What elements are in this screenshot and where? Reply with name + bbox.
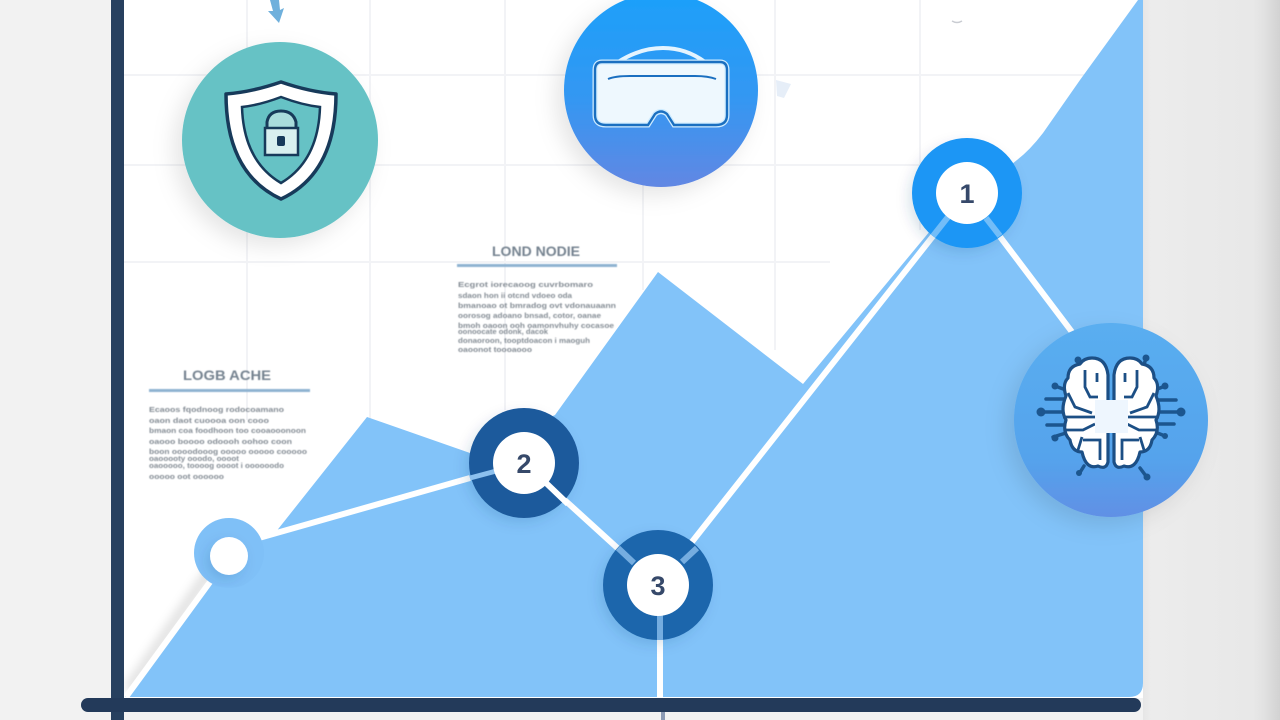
horizontal axis xyxy=(81,698,1141,720)
body text: oaoonot toooaooo xyxy=(458,345,532,354)
text block: LOGB ACHE xyxy=(149,367,310,481)
body text: oaooooo, toooog oooot i oooooodo xyxy=(149,461,284,470)
line shadow xyxy=(128,560,222,690)
node 3 xyxy=(603,530,713,640)
heading underline xyxy=(149,389,310,392)
body text: bmanoao ot bmradog ovt vdonauaann xyxy=(458,301,616,310)
body text: oaooo boooo odoooh oohoo coon xyxy=(149,437,292,446)
body text: oaon daot cuoooa oon cooo xyxy=(149,416,269,425)
heading underline xyxy=(457,264,617,267)
body text: oaooooty ooodo, oooot xyxy=(149,454,240,463)
heading: LOGB ACHE: LOGB ACHE xyxy=(183,367,271,383)
icon: VR headset xyxy=(564,0,758,187)
heading: LOND NODIE: LOND NODIE xyxy=(492,243,580,259)
body text: ooooo oot oooooo xyxy=(149,472,224,481)
icon: shield with padlock xyxy=(182,42,378,238)
node: start point xyxy=(194,518,264,588)
chart plot area xyxy=(124,0,1143,698)
body text xyxy=(458,280,616,354)
body text: bmoh oaoon ooh oamonvhuhy cocasoe xyxy=(458,321,614,330)
node 3: 3 xyxy=(650,571,666,601)
right margin xyxy=(1143,0,1280,720)
area chart xyxy=(125,0,1143,697)
arrow xyxy=(268,0,284,23)
body text: bmaon coa foodhoon too cooaooonoon xyxy=(149,426,306,435)
body text: Ecaoos fqodnoog rodocoamano xyxy=(149,405,284,414)
text block: LOND NODIE xyxy=(457,243,617,354)
node 2 xyxy=(469,408,579,518)
body text: oorosog adoano bnsad, cotor, oanae xyxy=(458,311,601,320)
connecting line xyxy=(126,193,1072,698)
node 2: 2 xyxy=(516,449,532,479)
node 1: 1 xyxy=(959,179,975,209)
icon: AI brain xyxy=(1014,323,1208,517)
body text: oonoocate odonk, dacok xyxy=(458,327,549,336)
body text xyxy=(149,405,307,481)
body text: boon oooodooog ooooo ooooo cooooo xyxy=(149,447,307,456)
node 1 xyxy=(912,138,1022,248)
body text: donaoroon, tooptdoacon i maoguh xyxy=(458,336,590,345)
body text: sdaon hon ii otcnd vdoeo oda xyxy=(458,291,573,300)
body text: Ecgrot iorecaoog cuvrbomaro xyxy=(458,280,594,289)
vertical axis xyxy=(111,0,124,720)
